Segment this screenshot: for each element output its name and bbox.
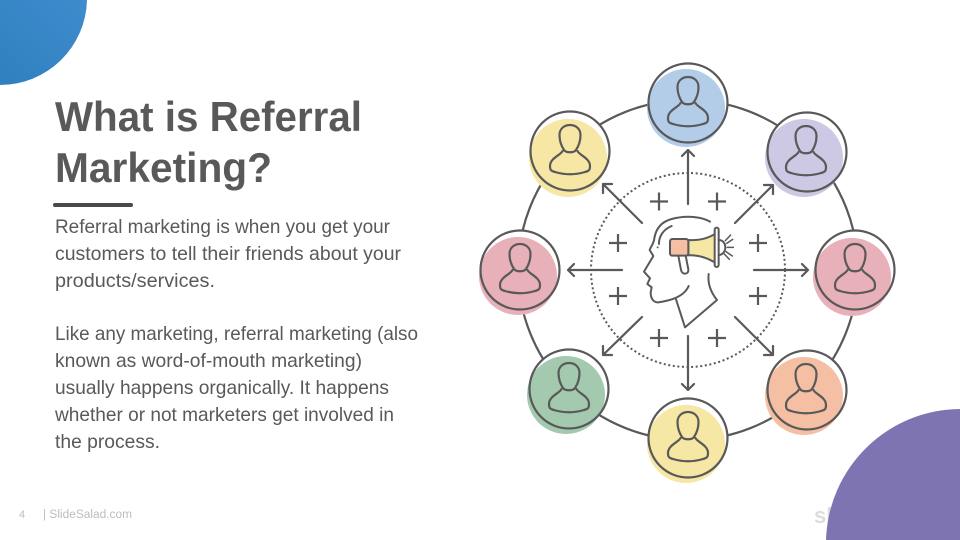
hair line — [659, 226, 672, 244]
person: left pink — [479, 230, 560, 315]
person: top left yellow — [529, 112, 610, 197]
text block: definition: Referral marketing is when you get your — [55, 216, 390, 238]
text block: definition: products/services. — [55, 270, 215, 292]
icon: head with megaphone — [644, 217, 733, 327]
neck — [676, 274, 717, 327]
text block: explanation: usually happens organically. It happens — [55, 377, 389, 399]
title — [55, 93, 362, 191]
outer ring — [518, 100, 858, 440]
text block: explanation: Like any marketing, referral marketing (also — [55, 323, 418, 345]
head outline — [644, 217, 710, 302]
dotted inner ring — [591, 173, 785, 367]
text block: explanation: the process. — [55, 431, 160, 453]
megaphone body — [688, 233, 716, 263]
person: bottom left green — [527, 350, 608, 434]
text block: definition — [55, 216, 401, 292]
person: top right purple — [765, 112, 846, 197]
text block: explanation — [54, 323, 418, 453]
page number: 4 — [19, 509, 25, 521]
text block: definition: customers to tell their friends about your — [55, 243, 401, 265]
watermark: sl — [814, 503, 832, 528]
sound rays — [724, 235, 733, 259]
megaphone rim — [715, 228, 719, 267]
text block: explanation: whether or not marketers get involved in — [54, 404, 394, 426]
plus signs — [609, 192, 767, 347]
megaphone bell — [719, 240, 725, 255]
megaphone handle — [678, 256, 688, 274]
text block: explanation: known as word-of-mouth marketing) — [55, 350, 362, 372]
title: Marketing? — [55, 144, 272, 191]
footer source: | SlideSalad.com — [43, 509, 132, 521]
person: top blue — [647, 64, 728, 147]
arrows — [568, 150, 808, 390]
title: What is Referral — [55, 93, 362, 140]
person: bottom right orange — [765, 350, 846, 435]
megaphone grip — [670, 239, 688, 256]
corner circle: purple bottom right — [826, 409, 960, 540]
title underline — [53, 203, 133, 207]
person: right pink — [813, 230, 894, 316]
corner circle: blue top left — [0, 0, 87, 85]
person: bottom yellow — [647, 398, 728, 483]
